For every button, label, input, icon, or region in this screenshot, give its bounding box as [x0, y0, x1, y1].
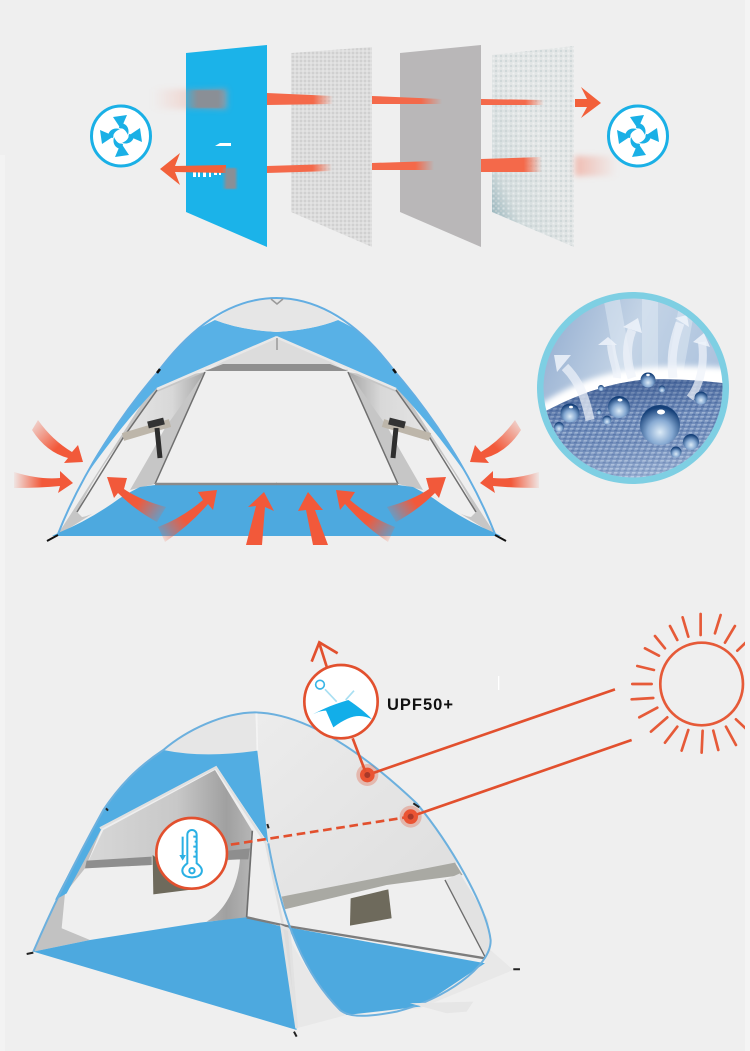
line: filtered ray dashed [228, 817, 411, 845]
mark: small white fleck [498, 676, 499, 690]
layer: woven inner fabric [492, 46, 574, 247]
callout: sun rays and lines [228, 614, 747, 845]
sphere interior [544, 298, 722, 478]
marker: lower point [400, 806, 422, 828]
tent blue piping [33, 712, 491, 1016]
layer: blue outer fabric [186, 45, 267, 247]
droplet highlights [569, 374, 665, 414]
tent right half [276, 298, 539, 542]
line: UPF connector [353, 738, 365, 772]
icon: fan right [608, 106, 668, 166]
tent base flap [283, 927, 513, 1028]
water droplets [554, 372, 708, 458]
tent roof notch [271, 299, 283, 350]
panel: front view tent with airflow arrows [14, 298, 539, 545]
tent front pole [282, 927, 297, 1028]
tent left pocket [153, 855, 193, 894]
tent right pocket [350, 889, 392, 926]
vapour arrows [565, 323, 703, 420]
tent inner seam [100, 767, 283, 927]
panel: breathable fabric sphere [535, 290, 735, 490]
tent right floor [288, 927, 485, 1015]
tent left strip [33, 828, 102, 952]
tent left half [14, 298, 277, 542]
tent label tag [410, 1002, 473, 1013]
icon: sun [632, 614, 747, 753]
line: sun ray to tent upper point [367, 689, 615, 775]
tent inner wall [85, 770, 252, 922]
arrow: airflow inward top [152, 87, 601, 118]
tent pegs [27, 803, 520, 1037]
tent gap behind pole [247, 830, 282, 927]
tent left floor [33, 917, 297, 1030]
tent top panel [163, 713, 257, 754]
line: sun ray to tent lower point [411, 740, 632, 817]
edge strip: right [745, 0, 750, 1051]
panel: fabric layers diagram [92, 45, 668, 247]
marker: upper point [356, 764, 378, 786]
panel: side view tent [27, 712, 520, 1037]
layer: silver mesh [291, 47, 372, 247]
text: white marks on blue layer [193, 143, 231, 177]
edge strip: left [0, 155, 5, 1051]
icon: fan left [92, 106, 150, 166]
tent right wall [256, 713, 457, 897]
arrow: airflow outward bottom [160, 153, 617, 189]
icon: UPF shield circle [304, 665, 378, 738]
tent right band [282, 863, 463, 909]
arrow: reflected UV [312, 642, 338, 667]
text: UPF50+: UPF50+ [387, 696, 454, 714]
arrow: centre left [246, 492, 274, 545]
icon: thermometer circle [156, 818, 227, 889]
tent band [85, 848, 250, 868]
tent right opening frame [445, 873, 491, 957]
layer: grey coating [400, 45, 481, 247]
arrow: centre right [298, 492, 328, 545]
tent blue canopy [55, 750, 268, 900]
